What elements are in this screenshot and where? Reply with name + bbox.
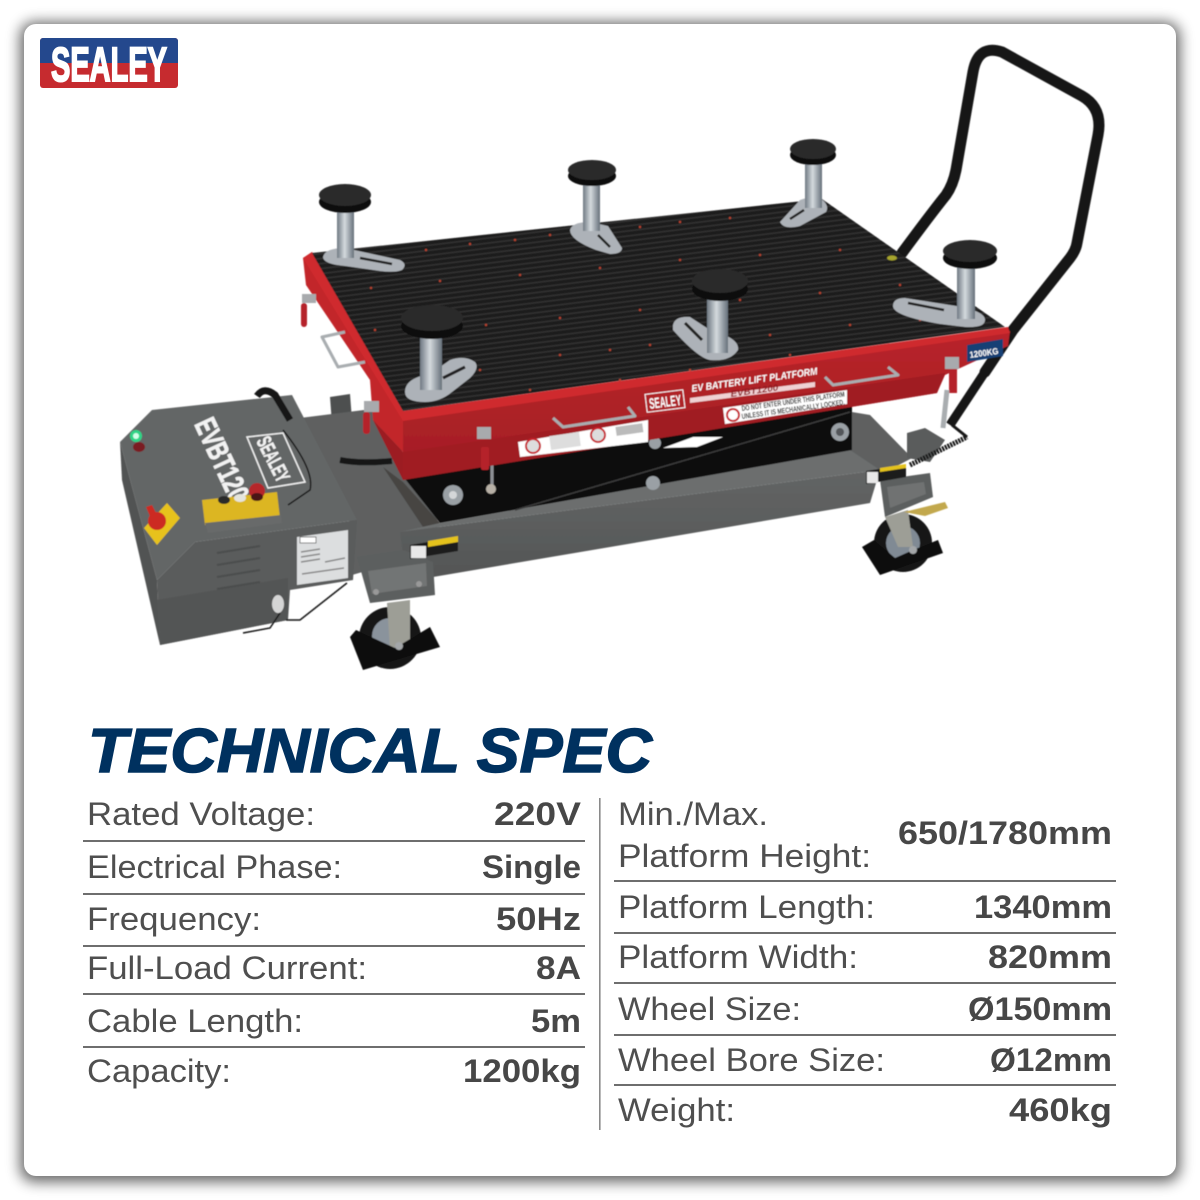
support pad 5	[893, 240, 997, 327]
row: frequency: Frequency:	[87, 901, 261, 937]
indicator lights	[130, 430, 145, 452]
support pad 3	[401, 305, 477, 402]
model text: EVBT120	[188, 413, 255, 507]
warning sticker: prohibitions	[518, 420, 648, 457]
row: weight	[618, 1092, 1112, 1128]
column divider	[599, 798, 601, 1130]
table: right column	[614, 796, 1116, 1128]
base frame	[300, 394, 933, 603]
row: capacity: 1200kg	[463, 1053, 581, 1089]
row: wheel size: Ø150mm	[968, 991, 1112, 1027]
support pad 6	[673, 269, 748, 360]
row: wheel size: Wheel Size:	[618, 991, 801, 1027]
row: electrical phase: Electrical Phase:	[87, 849, 342, 885]
brand plate	[247, 433, 305, 488]
row: cable length: 5m	[531, 1003, 581, 1039]
electrical control box	[120, 391, 357, 645]
row: platform width	[618, 939, 1112, 975]
isolator switch	[144, 503, 180, 545]
platform branding: EV BATTERY LIFT PLATFORM	[691, 366, 819, 395]
row: platform length	[618, 889, 1112, 925]
row: frequency: 50Hz	[496, 901, 581, 937]
title: TECHNICAL SPEC	[88, 717, 653, 786]
row: platform height: Platform Height:	[618, 838, 871, 874]
row: platform height: 650/1780mm	[898, 815, 1112, 851]
row: capacity: Capacity:	[87, 1053, 231, 1089]
warning labels on frame	[410, 464, 906, 559]
row: full-load current: Full-Load Current:	[87, 950, 367, 986]
product photo: EV battery lift platform	[120, 50, 1099, 670]
row: wheel bore size: Wheel Bore Size:	[618, 1042, 885, 1078]
row: full-load current	[87, 950, 581, 986]
row: frequency	[87, 901, 581, 937]
yellow pendant controller	[202, 483, 282, 533]
capacity badge: 1200KG	[969, 346, 999, 360]
row: cable length	[87, 1003, 581, 1039]
red platform body	[303, 252, 1010, 480]
platform branding: SEALEY	[648, 392, 682, 413]
row: platform width: 820mm	[988, 939, 1112, 975]
logo: Sealey: SEALEY	[51, 39, 167, 92]
row: capacity	[87, 1053, 581, 1089]
row: platform width: Platform Width:	[618, 939, 858, 975]
cables and plug	[243, 391, 347, 633]
brand plate: SEALEY	[252, 433, 294, 486]
row: electrical phase: Single	[482, 849, 581, 885]
platform branding	[645, 366, 819, 413]
platform branding: EVBT1200	[730, 382, 779, 399]
row: full-load current: 8A	[536, 950, 581, 986]
push handle	[902, 50, 1099, 372]
row: platform length: Platform Length:	[618, 889, 875, 925]
rubber platform top	[312, 199, 1005, 411]
spirit level	[887, 256, 897, 260]
row: wheel size	[618, 991, 1112, 1027]
row: rated voltage: 220V	[494, 796, 582, 832]
left caster wheel	[350, 600, 440, 670]
logo: Sealey	[40, 38, 178, 92]
support pad 2	[568, 160, 622, 254]
row: platform height	[618, 796, 1112, 874]
row: cable length: Cable Length:	[87, 1003, 303, 1039]
spec plate	[297, 530, 348, 585]
lever and spring	[907, 372, 985, 465]
row: platform length: 1340mm	[974, 889, 1112, 925]
scissor lift mechanism	[398, 375, 852, 523]
carry handles	[322, 332, 898, 427]
capacity badge	[967, 339, 1003, 362]
side clamps	[301, 294, 959, 470]
row: weight: 460kg	[1009, 1092, 1112, 1128]
warning sticker: do not enter: DO NOT ENTER UNDER THIS PLATFORM	[741, 390, 845, 413]
row: weight: Weight:	[618, 1092, 735, 1128]
row: platform height: Min./Max.	[618, 796, 768, 832]
warning sticker: do not enter	[723, 390, 847, 424]
platform rivet dots	[370, 217, 921, 391]
row: wheel bore size	[618, 1042, 1112, 1078]
row: electrical phase	[87, 849, 581, 885]
right caster wheel	[862, 502, 948, 575]
warning sticker: do not enter: UNLESS IT IS MECHANICALLY LOCKED.	[741, 398, 845, 421]
table: left column	[83, 796, 585, 1089]
row: rated voltage	[87, 796, 582, 832]
support pad 4	[780, 139, 836, 227]
row: wheel bore size: Ø12mm	[990, 1042, 1112, 1078]
support pad 1	[319, 184, 405, 272]
row: rated voltage: Rated Voltage:	[87, 796, 315, 832]
ventilation slots	[217, 546, 260, 589]
